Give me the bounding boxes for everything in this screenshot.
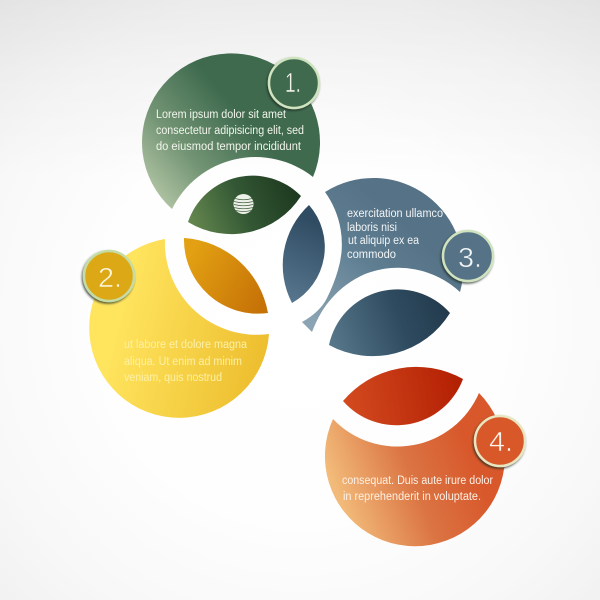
blue leaf horizontal (329, 289, 450, 356)
badge 4 (475, 416, 525, 466)
step 2 text (124, 339, 248, 384)
step 2 text: veniam, quis nostrud (124, 372, 222, 384)
step 3 text (347, 208, 443, 261)
red leaf (343, 367, 463, 425)
step 1 text: consectetur adipisicing elit, sed (156, 125, 304, 137)
step 3 text: exercitation ullamco (347, 208, 443, 220)
badge 4: 4. (489, 426, 513, 457)
icon: striped globe (234, 194, 254, 214)
badge 1: 1. (285, 67, 301, 98)
step 3 text: ut aliquip ex ea (348, 235, 420, 247)
yellow circle segment (89, 239, 269, 418)
panel: step 3 blue (283, 178, 493, 356)
badge 1 (269, 58, 319, 108)
panel: step 1 green (142, 53, 320, 234)
step 3 text: commodo (347, 249, 396, 261)
blue circle segment (302, 178, 463, 332)
orange circle segment (325, 393, 505, 546)
step 2 text: aliqua. Ut enim ad minim (124, 356, 242, 368)
blue leaf vertical (283, 205, 325, 303)
badge 2: 2. (98, 262, 122, 293)
amber leaf (184, 238, 268, 314)
step 1 text: Lorem ipsum dolor sit amet (156, 109, 287, 121)
badge 2 (84, 251, 134, 301)
panel: step 4 orange (325, 367, 525, 546)
step 1 text: do eiusmod tempor incididunt (156, 141, 302, 153)
step 4 text (342, 475, 493, 503)
step 1 text (156, 109, 304, 153)
step 3 text: laboris nisi (347, 222, 397, 234)
green leaf (188, 176, 301, 234)
step 4 text: in reprehenderit in voluptate. (343, 491, 481, 503)
panel: step 2 yellow (84, 238, 269, 418)
step 2 text: ut labore et dolore magna (124, 339, 248, 351)
badge 3 (443, 231, 493, 281)
green circle segment (142, 53, 320, 209)
step 4 text: consequat. Duis aute irure dolor (342, 475, 493, 487)
badge 3: 3. (458, 242, 482, 273)
